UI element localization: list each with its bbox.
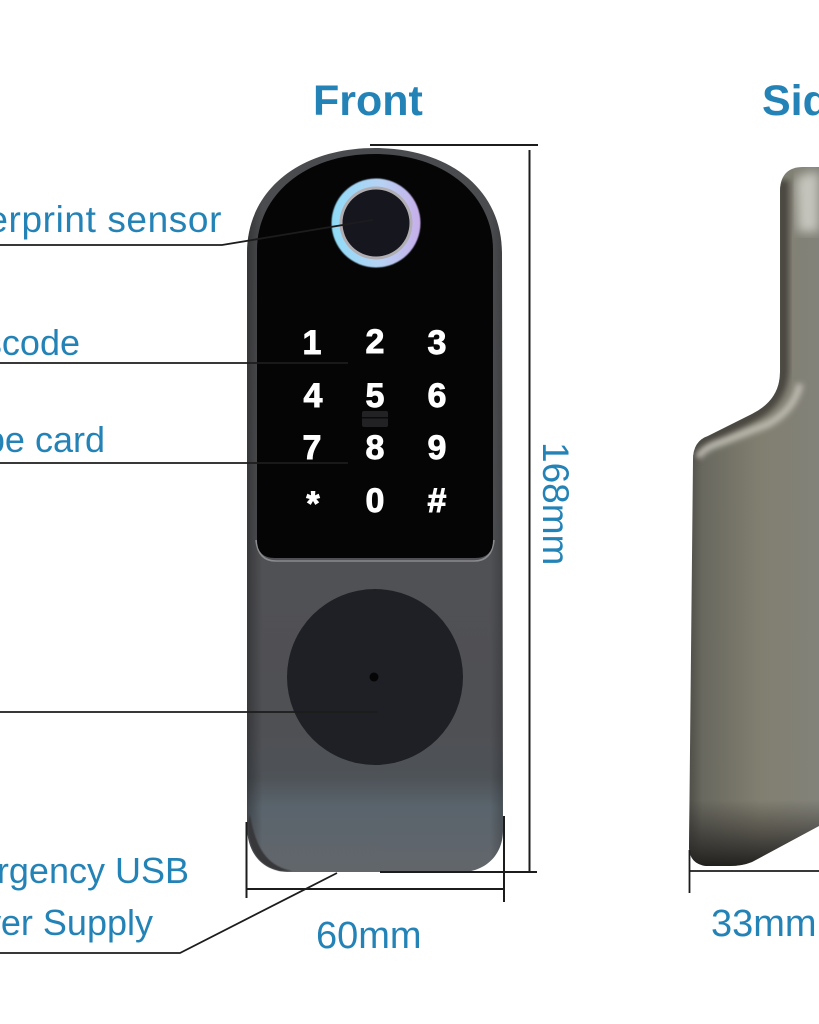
fingerprint sensor ring	[332, 178, 420, 268]
side shoulder highlight	[698, 384, 800, 458]
front view of lock	[247, 148, 503, 872]
knob	[287, 589, 463, 765]
keypad: 9	[428, 429, 446, 467]
leader lines and dimension lines	[0, 145, 819, 953]
heading: Front: Front	[313, 77, 423, 125]
leader: passcode	[0, 362, 348, 364]
touch panel	[257, 154, 493, 558]
keypad	[303, 323, 447, 523]
leader: knob	[0, 711, 378, 713]
keypad: 8	[366, 429, 384, 467]
keypad: 0	[366, 482, 384, 520]
side bottom shadow	[689, 806, 819, 866]
keypad: 4	[304, 377, 323, 415]
dimension: 60mm width	[246, 816, 504, 902]
card reader mark	[362, 411, 388, 427]
keypad: *	[306, 485, 320, 523]
dimension: 168mm height	[370, 145, 538, 872]
keypad: 3	[428, 324, 446, 362]
side body	[689, 167, 819, 866]
keypad: #	[428, 482, 447, 520]
keypad: 7	[303, 429, 321, 467]
dimension label: 60mm: 60mm	[316, 915, 422, 957]
side left dark edge	[695, 180, 783, 460]
keypad: 6	[428, 377, 446, 415]
dimension label: 168mm: 168mm	[535, 442, 576, 565]
keypad: 1	[303, 324, 321, 362]
dimension: 33mm depth	[689, 850, 819, 893]
lock body	[247, 148, 503, 872]
bottom-left shadow wedge	[248, 815, 292, 871]
leader: swipe card	[0, 462, 348, 464]
keypad: 5	[366, 377, 384, 415]
leader: fingerprint sensor	[0, 220, 373, 245]
panel edge highlight	[256, 540, 494, 561]
dimension label: 33mm: 33mm	[711, 903, 817, 945]
side top highlight	[796, 172, 819, 232]
leader: usb power	[0, 873, 337, 953]
side view of lock	[685, 167, 819, 870]
keypad: 2	[366, 323, 384, 361]
